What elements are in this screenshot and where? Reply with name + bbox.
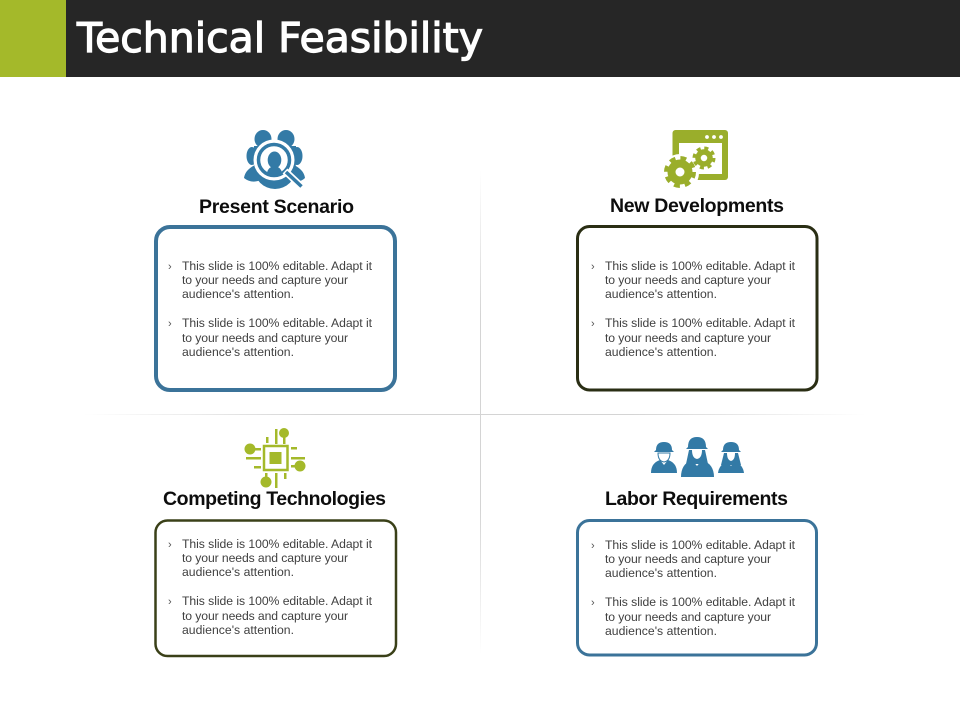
- bullet text: audience's attention.: [182, 565, 294, 579]
- heading: Competing Technologies: [163, 488, 386, 510]
- bullet text: to your needs and capture your: [182, 551, 348, 565]
- panel: Competing Technologies: [156, 428, 396, 656]
- bullet text: audience's attention.: [182, 287, 294, 301]
- bullet text: [591, 538, 796, 638]
- header bar: [0, 0, 960, 77]
- bullet text: ›: [168, 318, 172, 330]
- bullet text: to your needs and capture your: [605, 552, 771, 566]
- icon: three workers with hard hats: [651, 437, 744, 477]
- box: [156, 520, 396, 656]
- bullet text: ›: [168, 596, 172, 608]
- bullet text: to your needs and capture your: [605, 610, 771, 624]
- bullet text: audience's attention.: [605, 566, 717, 580]
- bullet text: to your needs and capture your: [605, 331, 771, 345]
- icon: people under magnifying glass: [244, 130, 305, 189]
- bullet text: This slide is 100% editable. Adapt it: [605, 538, 796, 552]
- bullet text: audience's attention.: [182, 623, 294, 637]
- box: [578, 226, 817, 390]
- icon: browser window with gears: [661, 130, 728, 192]
- bullet text: This slide is 100% editable. Adapt it: [182, 537, 373, 551]
- panel: Present Scenario: [156, 130, 395, 390]
- bullet text: ›: [591, 261, 595, 273]
- bullet text: [591, 259, 796, 359]
- bullet text: ›: [591, 597, 595, 609]
- bullet text: audience's attention.: [605, 624, 717, 638]
- bullet text: ›: [591, 540, 595, 552]
- bullet text: This slide is 100% editable. Adapt it: [182, 259, 373, 273]
- bullet text: to your needs and capture your: [182, 609, 348, 623]
- bullet text: [168, 537, 373, 637]
- bullet text: audience's attention.: [605, 287, 717, 301]
- bullet text: to your needs and capture your: [182, 273, 348, 287]
- bullet text: This slide is 100% editable. Adapt it: [605, 595, 796, 609]
- bullet text: audience's attention.: [182, 345, 294, 359]
- box: [578, 520, 816, 655]
- bullet text: [168, 259, 373, 359]
- panel: Labor Requirements: [578, 437, 816, 655]
- heading: Labor Requirements: [605, 488, 788, 510]
- bullet text: audience's attention.: [605, 345, 717, 359]
- icon: circuit chip: [244, 428, 306, 488]
- bullet text: to your needs and capture your: [182, 331, 348, 345]
- bullet text: This slide is 100% editable. Adapt it: [605, 316, 796, 330]
- heading: New Developments: [610, 195, 784, 217]
- bullet text: ›: [591, 318, 595, 330]
- box: [156, 227, 395, 390]
- bullet text: This slide is 100% editable. Adapt it: [605, 259, 796, 273]
- panel: New Developments: [578, 130, 817, 390]
- bullet text: to your needs and capture your: [605, 273, 771, 287]
- bullet text: ›: [168, 539, 172, 551]
- green accent block: [0, 0, 66, 77]
- bullet text: ›: [168, 261, 172, 273]
- bullet text: This slide is 100% editable. Adapt it: [182, 594, 373, 608]
- bullet text: This slide is 100% editable. Adapt it: [182, 316, 373, 330]
- title: Technical Feasibility: [76, 14, 483, 62]
- heading: Present Scenario: [199, 196, 354, 218]
